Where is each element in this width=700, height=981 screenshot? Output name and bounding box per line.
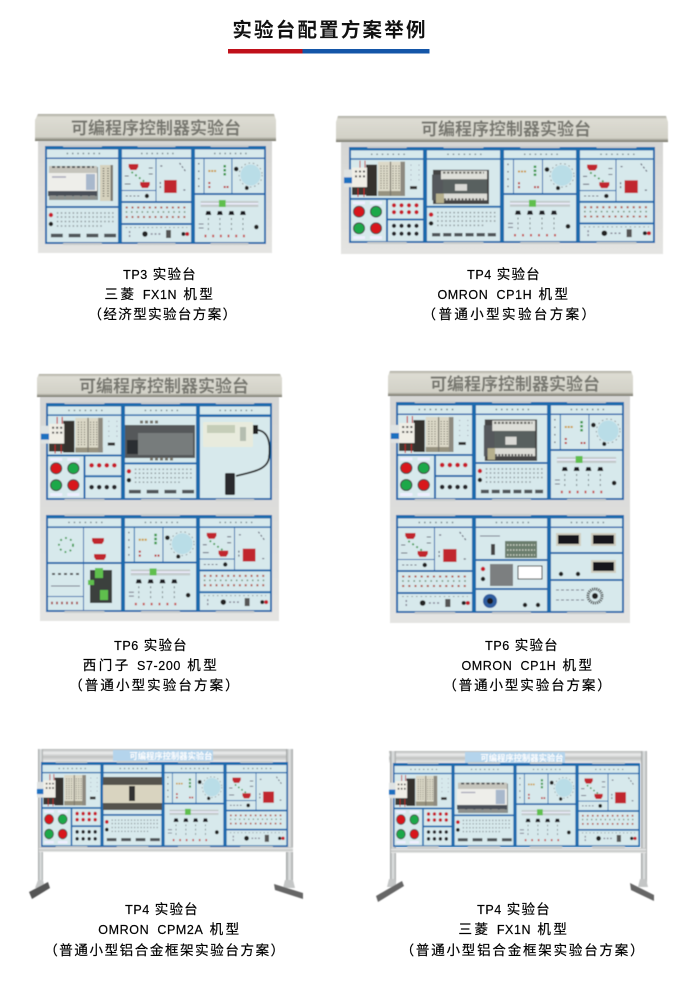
panel: TP4 OMRON CPM2A aluminium frame [29,749,303,958]
module: dial and conveyor column [123,514,198,613]
caption: TP6 S7-200 [69,638,241,693]
board heading badge: 可编程序控制器实验台 [481,753,563,763]
title underline [228,49,430,54]
module: power and buttons [389,762,453,848]
caption: TP6 CP1H: OMRON CP1H 机型 [461,658,595,673]
module: PLC column [453,762,515,848]
caption: TP4 CP1H: （普通小型实验台方案） [423,306,597,322]
caption: TP4 CPM2A: OMRON CPM2A 机型 [98,922,242,937]
module: CP1H PLC [432,170,489,204]
board: TP4 CP1H [336,116,668,254]
module: indicator column [396,514,474,614]
caption: TP3: TP3 实验台 [123,267,197,282]
module: indicator column [120,145,193,245]
caption: TP6 CP1H [443,638,613,693]
module: FX1N PLC [48,166,98,200]
module: indicator column [577,762,640,848]
panel: TP3 Mitsubishi FX1N [35,114,276,322]
caption: TP4 FX1N: 三菱 FX1N 机型 [459,922,569,937]
module: dial and conveyor column [515,762,577,848]
module: PLC column [123,402,198,501]
caption: TP3 [88,267,238,322]
module: dial and conveyor column [193,145,266,245]
panel: TP4 OMRON CP1H [336,116,668,322]
panel: TP4 Mitsubishi FX1N aluminium frame [376,751,654,958]
module: S7-200 PLC [125,422,195,459]
title: 实验台配置方案举例 [232,18,428,42]
board backing [341,141,663,254]
caption: TP4 CP1H: OMRON CP1H 机型 [437,287,571,302]
caption: TP4 CP1H: TP4 实验台 [467,267,541,282]
board: TP6 CP1H [388,371,633,623]
module: switching power supply [100,165,113,201]
caption: TP6 CP1H: （普通小型实验台方案） [443,677,613,693]
board: TP3 [35,114,276,253]
board heading [37,374,282,397]
board heading: 可编程序控制器实验台 [430,374,600,394]
board: TP4 FX1N [376,751,654,902]
aluminium frame and stand [376,751,654,902]
board heading badge: 可编程序控制器实验台 [130,751,212,761]
panel: TP6 OMRON CP1H [388,371,633,693]
module: FX1N PLC [457,783,508,813]
board heading: 可编程序控制器实验台 [79,376,249,396]
module: indicator column [198,514,272,613]
module: dial and conveyor column [549,401,624,501]
board heading [336,116,668,142]
module: power and buttons [41,402,123,501]
board backing [390,395,630,623]
board backing [40,396,279,621]
module: dial and conveyor column [502,146,578,244]
board heading [388,371,633,396]
module: relay, meter and fan column [474,514,549,614]
board heading: 可编程序控制器实验台 [421,119,591,139]
module: power and buttons [391,401,474,501]
module: power and buttons [37,761,102,848]
board heading [35,114,276,141]
caption: TP6 S7-200: 西门子 S7-200 机型 [83,658,219,673]
module: dial and conveyor column [163,761,225,848]
module: HMI text display [198,402,272,501]
caption: TP6 S7-200: （普通小型实验台方案） [69,677,241,693]
module: indicator column [578,146,655,244]
board: TP6 S7-200 [37,374,282,621]
board backing [38,140,272,253]
caption: TP6 CP1H: TP6 实验台 [485,638,559,653]
aluminium frame and stand [29,749,303,899]
caption: TP4 FX1N: TP4 实验台 [477,902,551,917]
module: CP1H PLC [484,419,537,461]
caption: TP4 CP1H [423,267,597,322]
module: power and buttons [344,146,425,244]
module: CPM2A PLC [103,777,162,810]
module: PLC column [45,145,120,245]
caption: TP3: （经济型实验台方案） [88,306,238,322]
module: PLC column [474,401,549,501]
caption: TP6 S7-200: TP6 实验台 [114,638,188,653]
lower board: custom indicator column [46,514,123,613]
caption: TP4 CPM2A: TP4 实验台 [125,902,199,917]
module: indicator column [225,761,288,848]
caption: TP4 FX1N [401,902,645,958]
module: PLC column [102,761,163,848]
caption: TP4 CPM2A: （普通小型铝合金框架实验台方案） [44,942,286,958]
caption: TP4 FX1N: （普通小型铝合金框架实验台方案） [401,942,645,958]
board: TP4 CPM2A [29,749,303,899]
caption: TP3: 三菱 FX1N 机型 [105,287,215,302]
panel: TP6 Siemens S7-200 [37,374,282,693]
board heading: 可编程序控制器实验台 [71,118,241,138]
caption: TP4 CPM2A [44,902,286,958]
module: PLC column [425,146,502,244]
module: digital display column [549,514,624,614]
